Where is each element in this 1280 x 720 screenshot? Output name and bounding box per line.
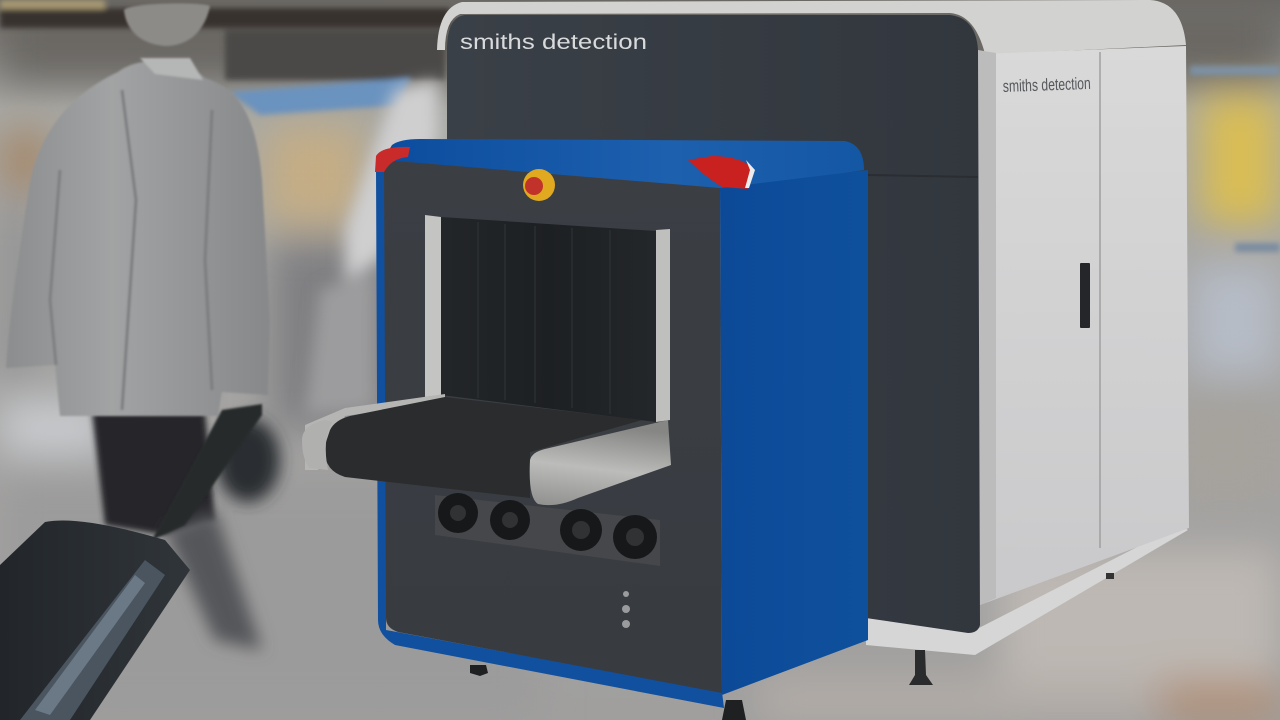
door handle — [1080, 263, 1090, 328]
grey slot behind rollers — [435, 495, 660, 566]
indicator lights — [622, 591, 630, 628]
blurred background figure — [305, 80, 438, 415]
emergency stop button — [523, 169, 555, 201]
machine base — [866, 525, 1188, 655]
blue frame left and bottom — [376, 162, 724, 708]
machine foot — [909, 650, 933, 685]
brand on dark panel: smiths detection — [460, 31, 647, 54]
brand on cabinet: smiths detection — [1002, 74, 1091, 96]
blue top — [377, 139, 864, 190]
jacket — [6, 58, 270, 416]
cabinet door seam — [1099, 52, 1101, 548]
dark front face — [384, 161, 722, 693]
fans — [438, 493, 657, 559]
white top cover — [437, 0, 1186, 54]
blue side panel — [720, 170, 868, 695]
conveyor belt — [302, 394, 671, 505]
suitcase handle — [152, 404, 262, 540]
red corner: left — [375, 147, 410, 172]
white side cabinet — [980, 46, 1189, 605]
person walking with suitcase — [0, 3, 280, 720]
tunnel opening — [425, 215, 670, 422]
head — [124, 3, 210, 46]
trousers — [92, 412, 215, 535]
front scanner — [302, 139, 868, 720]
red corner: right — [688, 156, 754, 189]
feet — [470, 665, 488, 676]
suitcase — [0, 520, 190, 720]
rear scanner — [437, 0, 1189, 685]
dark front panel — [447, 15, 980, 633]
